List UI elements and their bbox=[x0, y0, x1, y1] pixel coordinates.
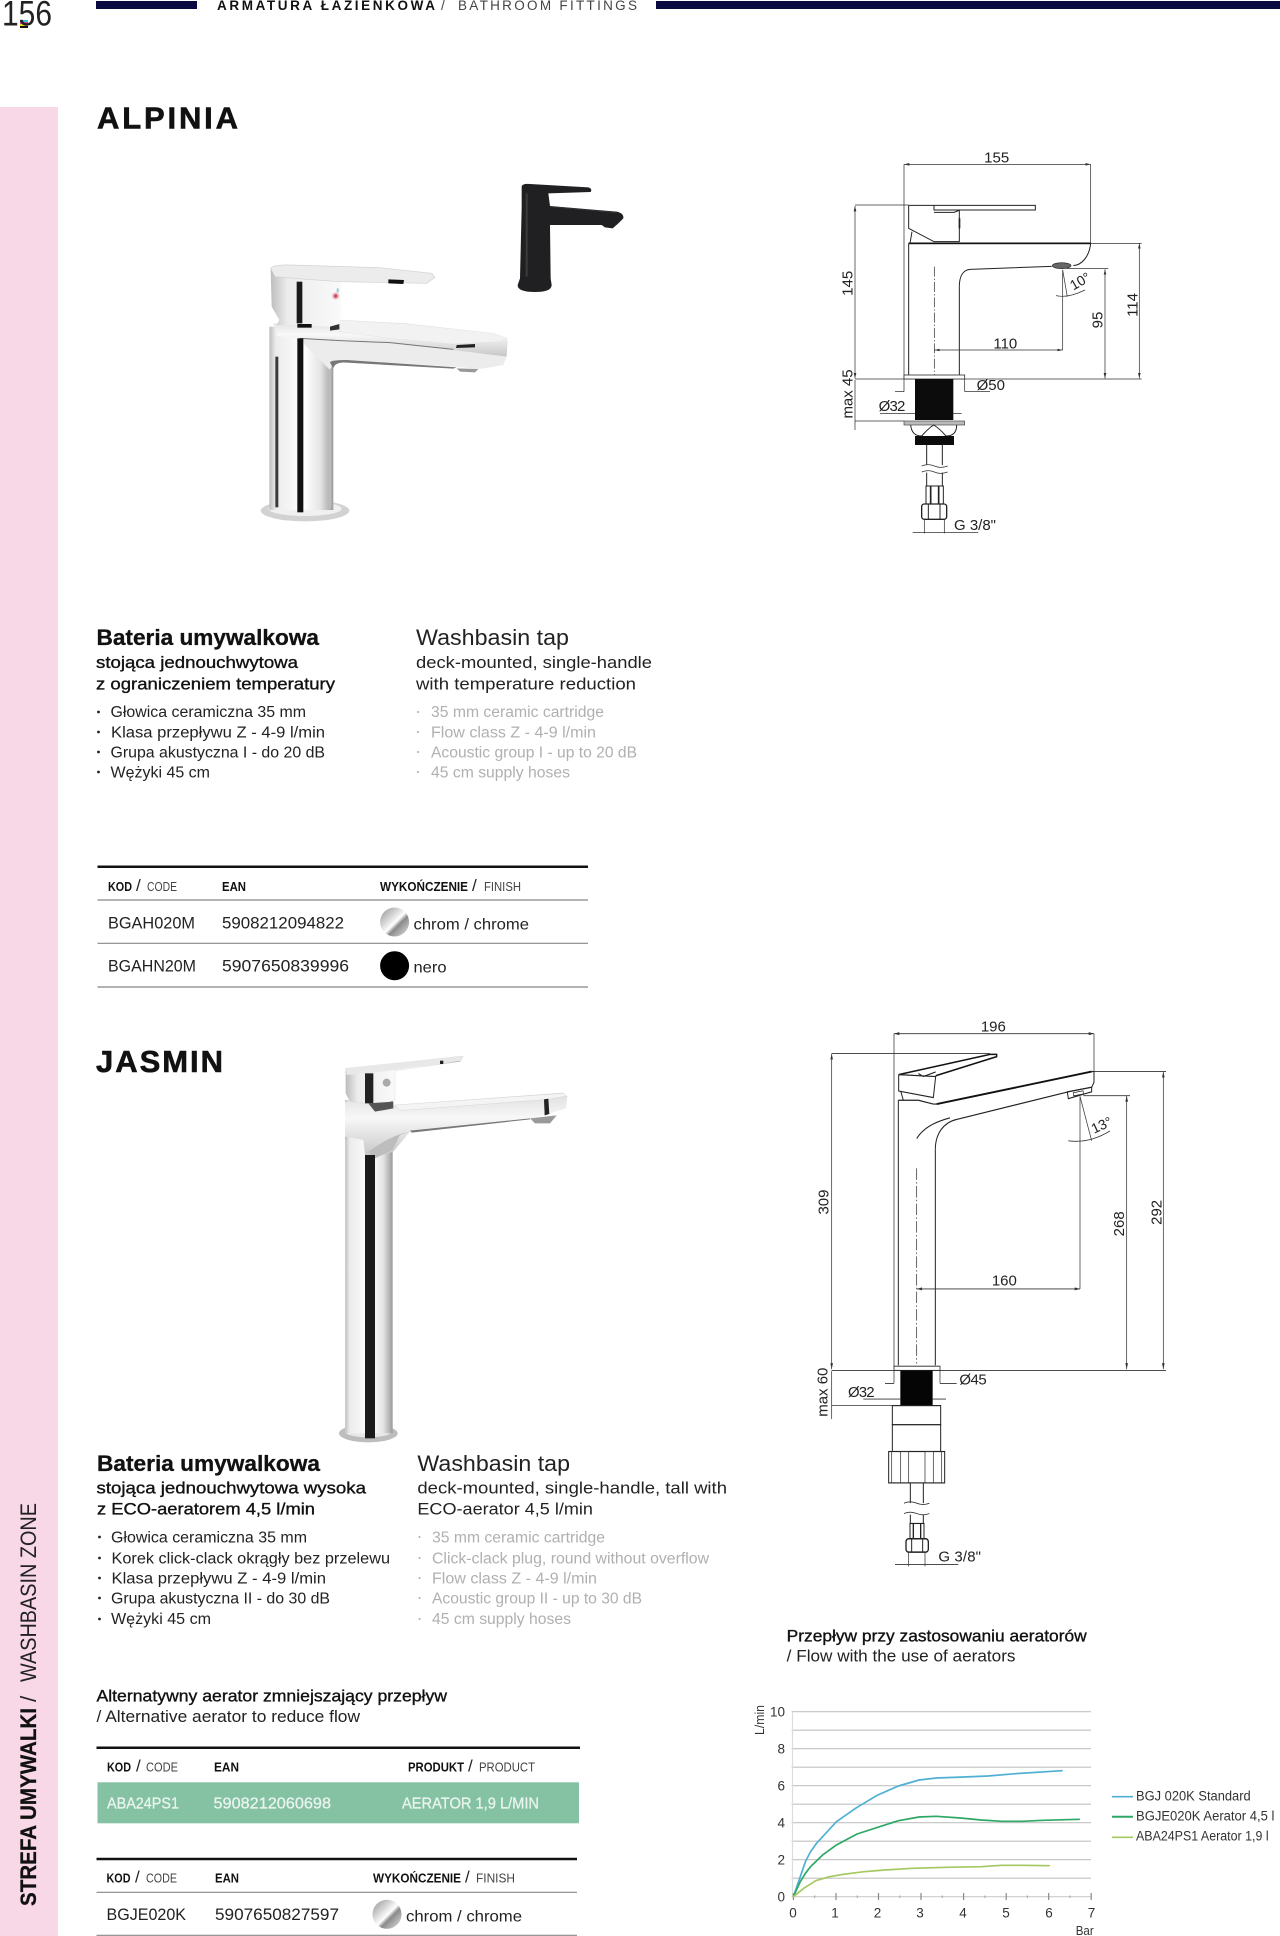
table: Alpinia codes: 5908212094822 bbox=[222, 914, 344, 932]
table: Alpinia codes: BGAH020M bbox=[108, 914, 195, 932]
text block: Polish description: Głowica ceramiczna 35 mm bbox=[110, 704, 306, 721]
photo: chrome tap Alpinia bbox=[261, 265, 508, 521]
sidebar label bbox=[16, 1503, 41, 1906]
dimension: max 45: max 45 bbox=[840, 369, 857, 419]
text block: Polish description: Korek click-clack okrągły bez przelewu bbox=[112, 1550, 390, 1567]
table: Jasmin codes: 5907650827597 bbox=[215, 1906, 339, 1924]
text block: English description: 35 mm ceramic cartridge bbox=[432, 1529, 605, 1546]
table: aerator product bbox=[96, 1748, 580, 1823]
y axis labels: L/min bbox=[752, 1705, 767, 1735]
dimension: 114 bbox=[1091, 243, 1142, 378]
x axis labels: 1 bbox=[831, 1905, 839, 1920]
title: JASMIN: JASMIN bbox=[96, 1044, 223, 1079]
table: Jasmin codes: / bbox=[465, 1868, 470, 1887]
dimension: spout reach 110 bbox=[934, 270, 1063, 352]
x axis labels: 7 bbox=[1088, 1905, 1095, 1920]
table: Alpinia codes: 5907650839996 bbox=[222, 958, 349, 976]
sidebar label: WASHBASIN ZONE bbox=[16, 1503, 41, 1682]
highlighted row: aerator bbox=[98, 1782, 579, 1823]
table: Alpinia codes: WYKOŃCZENIE bbox=[380, 879, 468, 894]
tap outline bbox=[904, 205, 1091, 519]
dimension: angle 10°: 10° bbox=[1067, 269, 1093, 293]
legend: BGJE020K Aerator 4,5 l bbox=[1136, 1808, 1274, 1824]
tap outline bbox=[889, 1054, 1094, 1552]
heading: alternative aerator: / Alternative aerator to reduce flow bbox=[96, 1708, 360, 1726]
dimension: Ø45 bbox=[885, 1370, 987, 1389]
table: aerator product: / bbox=[136, 1757, 141, 1776]
photo: black tap Alpinia bbox=[518, 184, 623, 292]
text block: Polish description: Bateria umywalkowa bbox=[96, 625, 320, 650]
text block: Polish description: Bateria umywalkowa bbox=[97, 1451, 321, 1476]
text block: English description: Flow class Z - 4-9 l/min bbox=[432, 1570, 597, 1587]
dimension: 95 bbox=[1067, 269, 1108, 378]
highlighted row: aerator: ABA24PS1 bbox=[107, 1795, 179, 1812]
text block: English description: deck-mounted, single-handle, tall with bbox=[417, 1479, 727, 1497]
y axis labels: 4 bbox=[777, 1816, 785, 1831]
dimension: height 309 bbox=[815, 1054, 1166, 1406]
text block: English description: Flow class Z - 4-9 l/min bbox=[431, 725, 596, 742]
x axis labels: 0 bbox=[789, 1905, 797, 1920]
chart grid bbox=[792, 1712, 1091, 1900]
highlighted row: aerator: AERATOR 1,9 L/MIN bbox=[402, 1795, 539, 1812]
dimension: spout reach 110: 110 bbox=[993, 335, 1017, 352]
table: Alpinia codes: / bbox=[136, 876, 141, 895]
dimension: Ø50: Ø50 bbox=[977, 377, 1005, 394]
x axis labels bbox=[789, 1905, 1095, 1936]
dimension: angle 10° bbox=[1056, 269, 1093, 297]
table: Jasmin codes: BGJE020K bbox=[106, 1906, 186, 1924]
text block: Polish description: Grupa akustyczna I - do 20 dB bbox=[110, 744, 325, 761]
dimension: G 3/8": G 3/8" bbox=[938, 1549, 981, 1566]
text block: English description: Washbasin tap bbox=[416, 625, 569, 650]
table: Jasmin codes: / bbox=[135, 1868, 140, 1887]
x axis labels: 6 bbox=[1045, 1905, 1053, 1920]
sidebar label: / bbox=[16, 1695, 41, 1702]
table: aerator product: EAN bbox=[214, 1761, 239, 1775]
dimension: angle 13°: 13° bbox=[1089, 1113, 1114, 1137]
heading: alternative aerator bbox=[96, 1688, 447, 1726]
text block: Polish description: stojąca jednouchwytowa wysoka bbox=[96, 1479, 367, 1497]
dimension: Ø32: Ø32 bbox=[848, 1384, 875, 1401]
table: Jasmin codes: WYKOŃCZENIE bbox=[373, 1871, 461, 1886]
text block: English description bbox=[417, 1451, 727, 1628]
text block: Polish description: z ograniczeniem temperatury bbox=[96, 676, 336, 694]
table: aerator product: KOD bbox=[107, 1761, 131, 1775]
dimension: angle 13° bbox=[1068, 1096, 1114, 1141]
heading: alternative aerator: Alternatywny aerator zmniejszający przepływ bbox=[96, 1688, 447, 1706]
header band bbox=[96, 0, 1280, 13]
title: ALPINIA: ALPINIA bbox=[97, 100, 238, 136]
text block: English description bbox=[415, 625, 652, 782]
table: Alpinia codes bbox=[98, 867, 588, 987]
table: aerator product: PRODUCT bbox=[479, 1761, 535, 1775]
table: Alpinia codes: / bbox=[472, 876, 477, 895]
sidebar: pink zone strip bbox=[0, 107, 58, 1936]
heading: flow chart: / Flow with the use of aerators bbox=[787, 1648, 1016, 1666]
x axis labels: 3 bbox=[916, 1905, 924, 1920]
table: Alpinia codes: chrom / chrome bbox=[414, 916, 529, 934]
dimension: G 3/8" bbox=[913, 517, 996, 534]
dimension: 114: 114 bbox=[1124, 293, 1141, 317]
dimension: overall width 155: 155 bbox=[984, 149, 1009, 166]
y axis labels: 2 bbox=[777, 1853, 785, 1868]
y axis labels: 6 bbox=[777, 1779, 785, 1794]
legend: ABA24PS1 Aerator 1,9 l bbox=[1136, 1828, 1269, 1844]
table: Jasmin codes: CODE bbox=[146, 1872, 177, 1886]
table: aerator product: / bbox=[468, 1757, 473, 1776]
y axis labels: 10 bbox=[770, 1705, 785, 1720]
table: Alpinia codes: FINISH bbox=[484, 880, 521, 894]
heading: flow chart bbox=[787, 1628, 1087, 1666]
table: Alpinia codes: EAN bbox=[222, 880, 246, 894]
text block: Polish description: Wężyki 45 cm bbox=[110, 765, 210, 782]
text block: English description: 35 mm ceramic cartridge bbox=[431, 704, 604, 721]
y axis labels: 8 bbox=[777, 1742, 785, 1757]
panel: ALPINIA bbox=[96, 100, 1142, 987]
text block: English description: 45 cm supply hoses bbox=[431, 765, 570, 782]
x axis labels: 5 bbox=[1002, 1905, 1010, 1920]
table: Alpinia codes: nero bbox=[414, 960, 447, 977]
text block: Polish description: Wężyki 45 cm bbox=[111, 1611, 211, 1628]
series lines bbox=[793, 1771, 1079, 1897]
dimension: Ø32 bbox=[879, 398, 962, 415]
table: Jasmin codes: chrom / chrome bbox=[406, 1909, 522, 1926]
text block: Polish description bbox=[96, 625, 336, 782]
table: Jasmin codes: FINISH bbox=[476, 1872, 515, 1886]
table: Jasmin codes bbox=[96, 1859, 577, 1935]
text block: Polish description: Grupa akustyczna II - do 30 dB bbox=[111, 1590, 330, 1607]
text block: English description: deck-mounted, single-handle bbox=[416, 654, 652, 672]
dimension: overall width 196: 196 bbox=[981, 1018, 1006, 1035]
text block: Polish description: stojąca jednouchwytowa bbox=[96, 654, 299, 672]
table: Jasmin codes: EAN bbox=[215, 1872, 239, 1886]
dimension: 268: 268 bbox=[1111, 1211, 1128, 1236]
technical drawing: Jasmin dimensions bbox=[814, 1018, 1166, 1566]
y axis labels: 0 bbox=[777, 1890, 785, 1905]
dimension: height 145: 145 bbox=[840, 271, 857, 296]
text block: Polish description: Głowica ceramiczna 35 mm bbox=[111, 1529, 307, 1546]
legend: BGJ 020K Standard bbox=[1136, 1788, 1251, 1804]
text block: English description: Acoustic group II - up to 30 dB bbox=[432, 1590, 642, 1607]
table: Alpinia codes: KOD bbox=[108, 880, 132, 894]
line chart: flow vs pressure bbox=[752, 1705, 1274, 1936]
legend bbox=[1112, 1788, 1274, 1844]
text block: English description: with temperature reduction bbox=[415, 676, 636, 694]
text block: English description: ECO-aerator 4,5 l/min bbox=[417, 1500, 593, 1518]
x axis labels: 4 bbox=[959, 1905, 967, 1920]
dimension: 95: 95 bbox=[1090, 312, 1107, 328]
text block: English description: 45 cm supply hoses bbox=[432, 1611, 571, 1628]
dimension: overall width 196 bbox=[894, 1018, 1094, 1369]
text block: English description: Click-clack plug, round without overflow bbox=[432, 1550, 710, 1567]
text block: Polish description bbox=[96, 1451, 390, 1628]
heading: flow chart: Przepływ przy zastosowaniu aeratorów bbox=[787, 1628, 1087, 1646]
text block: English description: Acoustic group I - up to 20 dB bbox=[431, 744, 637, 761]
text block: English description: Washbasin tap bbox=[417, 1451, 570, 1476]
x axis labels: 2 bbox=[874, 1905, 881, 1920]
table: aerator product: CODE bbox=[146, 1761, 178, 1775]
dimension: 292: 292 bbox=[1149, 1200, 1166, 1225]
dimension: Ø32: Ø32 bbox=[879, 398, 905, 415]
dimension: spout reach 160: 160 bbox=[992, 1272, 1017, 1289]
text block: Polish description: Klasa przepływu Z - 4-9 l/min bbox=[112, 1570, 326, 1587]
dimension: overall width 155 bbox=[904, 149, 1091, 378]
dimension: Ø32 bbox=[848, 1384, 946, 1401]
photo: tall chrome tap Jasmin bbox=[339, 1056, 567, 1442]
table: Alpinia codes: CODE bbox=[147, 880, 177, 894]
table: Jasmin codes: KOD bbox=[106, 1872, 130, 1886]
table: aerator product: PRODUKT bbox=[408, 1761, 464, 1775]
text block: Polish description: z ECO-aeratorem 4,5 l/min bbox=[97, 1500, 315, 1518]
dimension: max 60: max 60 bbox=[814, 1368, 831, 1417]
panel: JASMIN bbox=[96, 1018, 1274, 1936]
sidebar label: STREFA UMYWALKI bbox=[16, 1708, 41, 1906]
dimension: height 145 bbox=[840, 205, 1142, 421]
dimension: Ø45: Ø45 bbox=[959, 1372, 987, 1389]
dimension: G 3/8" bbox=[895, 1549, 981, 1566]
highlighted row: aerator: 5908212060698 bbox=[214, 1795, 331, 1812]
dimension: height 309: 309 bbox=[815, 1190, 832, 1215]
dimension: G 3/8": G 3/8" bbox=[954, 517, 996, 534]
y axis labels bbox=[752, 1705, 785, 1905]
dimension: Ø50 bbox=[895, 377, 1005, 394]
technical drawing: Alpinia dimensions bbox=[840, 149, 1142, 534]
table: Alpinia codes: BGAHN20M bbox=[108, 958, 196, 976]
text block: Polish description: Klasa przepływu Z - 4-9 l/min bbox=[111, 725, 325, 742]
